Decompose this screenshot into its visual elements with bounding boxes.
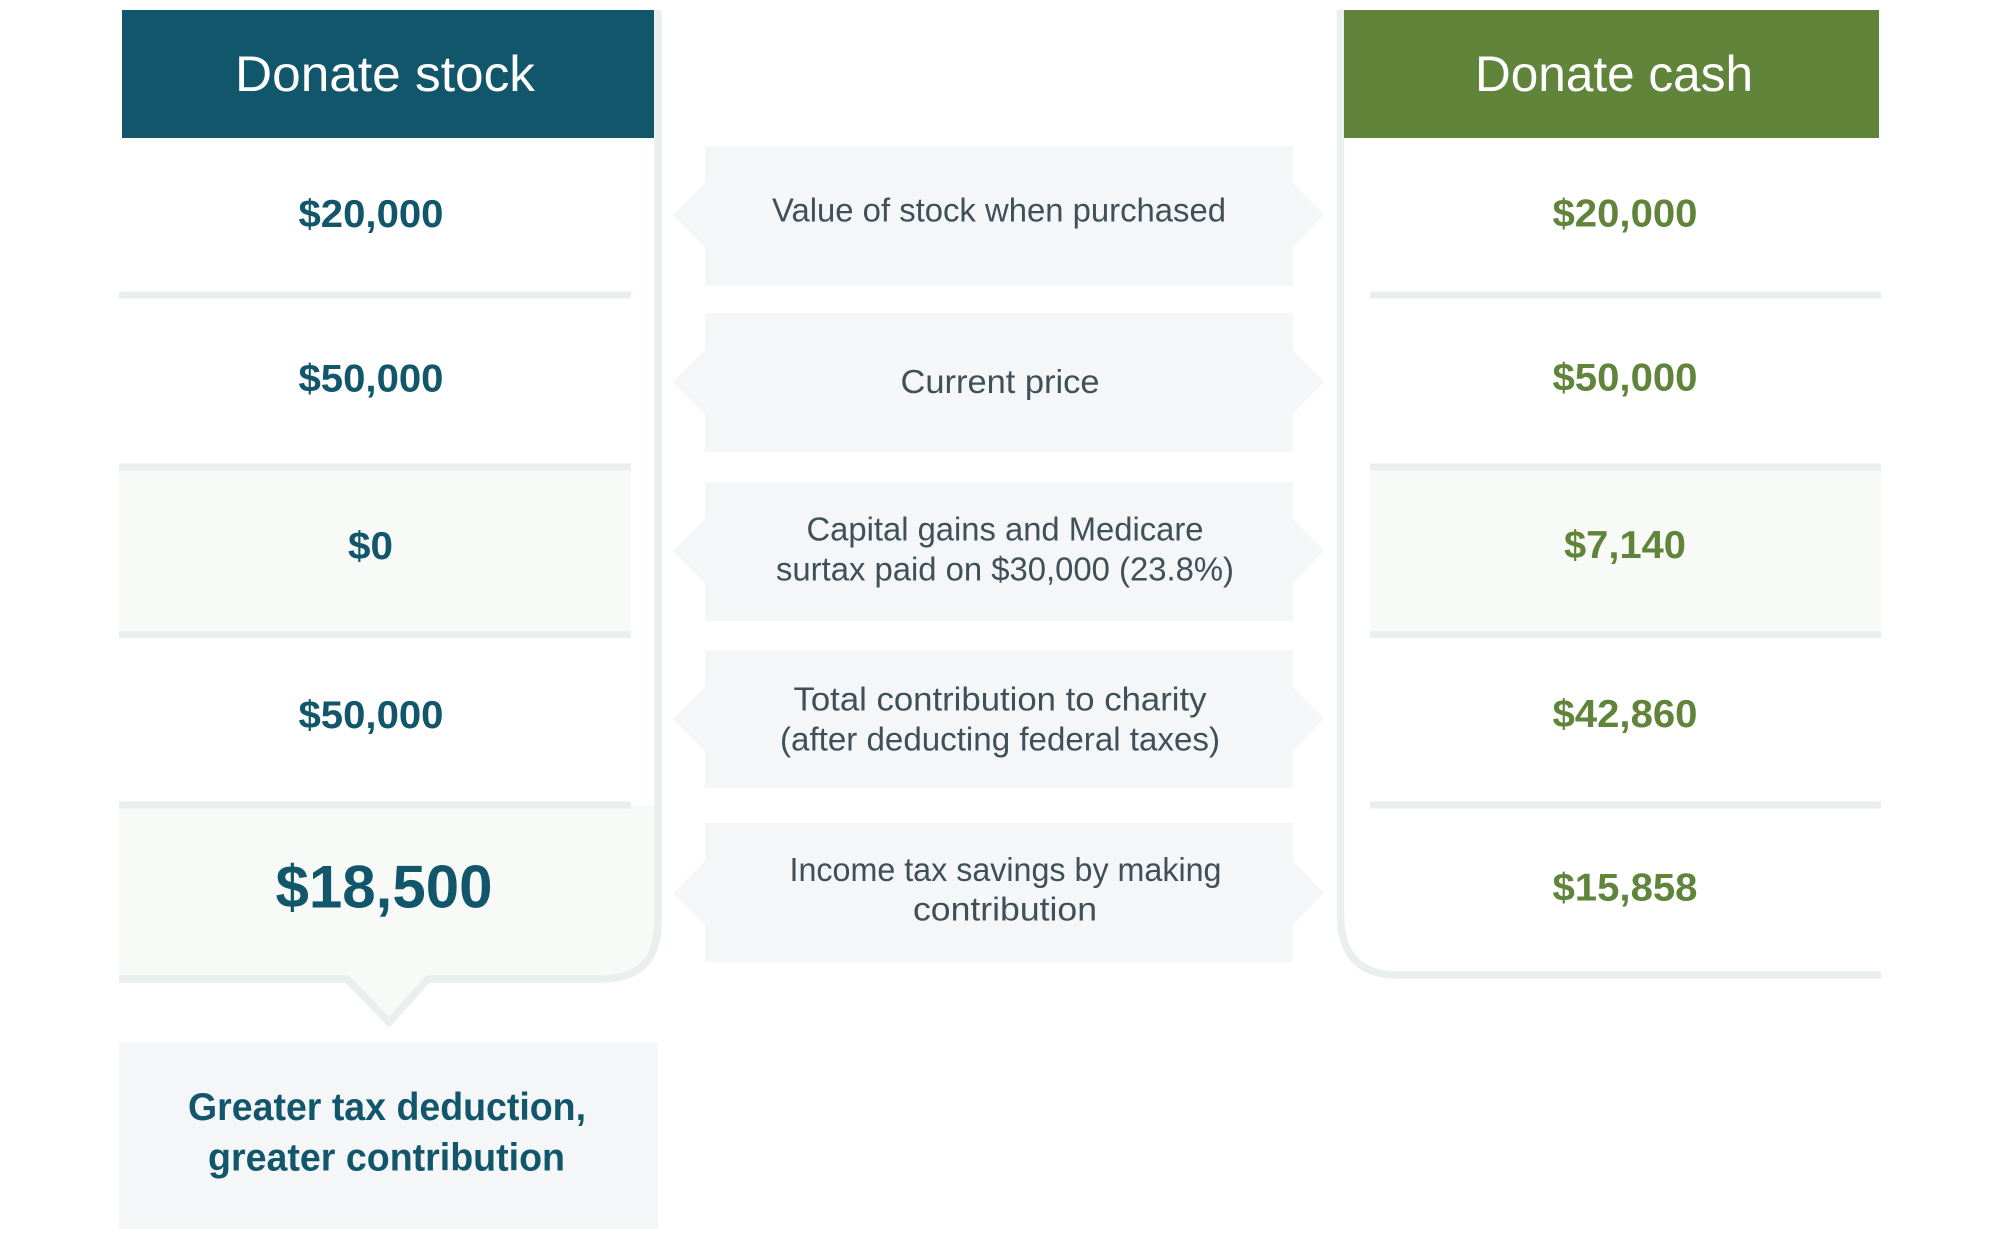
values: donate cash: $50,000 xyxy=(1552,356,1698,400)
label: income tax savings xyxy=(673,823,1324,962)
tinted row: capital gains xyxy=(119,467,631,635)
label: value of stock when purchased xyxy=(673,146,1324,286)
label: value of stock when purchased: Value of stock when purchased xyxy=(772,192,1226,228)
header: donate stock: Donate stock xyxy=(235,46,536,102)
label: current price xyxy=(673,313,1324,452)
header: donate cash: Donate cash xyxy=(1475,46,1753,102)
values: donate cash: $42,860 xyxy=(1552,693,1698,736)
callout: greater tax deduction: Greater tax deduction, xyxy=(188,1086,586,1129)
callout: greater tax deduction: greater contribution xyxy=(208,1136,565,1180)
label: total contribution to charity: (after deducting federal taxes) xyxy=(780,720,1220,758)
row divider lines xyxy=(119,295,631,805)
label: income tax savings: contribution xyxy=(913,890,1097,928)
values: donate stock: $18,500 xyxy=(276,854,492,920)
values: donate stock: $50,000 xyxy=(298,694,444,737)
values: donate cash xyxy=(1552,192,1698,910)
panel: donate cash column xyxy=(1340,10,1881,975)
label: capital gains and Medicare surtax: surtax paid on $30,000 (23.8%) xyxy=(776,550,1234,588)
row divider lines xyxy=(1370,295,1881,805)
label: income tax savings: Income tax savings by making xyxy=(790,851,1222,888)
header: donate cash xyxy=(1344,10,1879,138)
label: total contribution to charity xyxy=(673,650,1324,788)
values: donate stock: $50,000 xyxy=(298,358,444,400)
label: capital gains and Medicare surtax: Capital gains and Medicare xyxy=(806,510,1204,548)
callout: greater tax deduction xyxy=(119,1042,658,1229)
values: donate cash: $15,858 xyxy=(1552,866,1698,910)
label: capital gains and Medicare surtax xyxy=(673,482,1324,621)
panel: donate stock column xyxy=(119,10,658,1022)
values: donate cash: $7,140 xyxy=(1564,524,1686,567)
highlighted callout row: income tax savings xyxy=(119,805,656,1022)
header: donate stock xyxy=(122,10,654,138)
label: total contribution to charity: Total contribution to charity xyxy=(794,680,1207,718)
column outline xyxy=(1340,10,1881,975)
values: donate stock xyxy=(276,193,492,920)
values: donate stock: $20,000 xyxy=(298,193,444,236)
values: donate cash: $20,000 xyxy=(1552,192,1698,236)
column outline with callout pointer xyxy=(119,10,658,1022)
values: donate stock: $0 xyxy=(348,525,393,568)
label: current price: Current price xyxy=(900,363,1100,400)
tinted row: capital gains xyxy=(1370,467,1881,635)
panel: comparison labels xyxy=(673,146,1324,962)
